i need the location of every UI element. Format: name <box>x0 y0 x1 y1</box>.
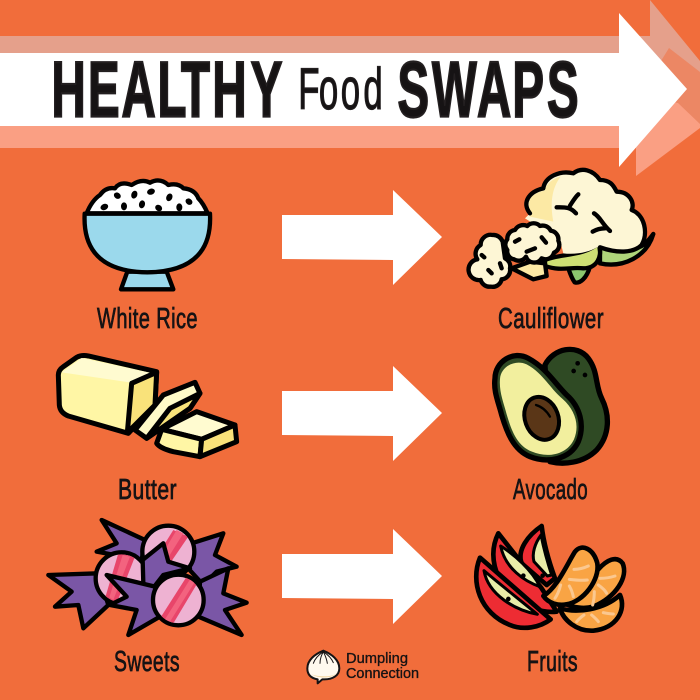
label: butter: Butter <box>118 474 177 506</box>
label: sweets: Sweets <box>114 646 180 678</box>
arrow: butter to avocado <box>282 366 442 461</box>
icon: avocado <box>495 349 607 463</box>
label: avocado: Avocado <box>513 474 588 506</box>
label: white rice: White Rice <box>97 303 198 335</box>
icon: sweets <box>48 520 247 635</box>
label: fruits: Fruits <box>527 646 578 678</box>
icon: cauliflower <box>469 170 653 287</box>
icon: butter <box>58 356 237 457</box>
arrow: rice to cauliflower <box>282 190 442 285</box>
logo: dumpling connection <box>307 651 419 683</box>
icon: fruits <box>476 526 624 631</box>
label: cauliflower: Cauliflower <box>498 303 604 335</box>
logo text <box>346 651 419 682</box>
logo text: Connection <box>346 666 419 682</box>
icon: white rice bowl <box>85 180 210 289</box>
title: Food <box>298 58 383 122</box>
title: SWAPS <box>398 45 579 133</box>
title <box>51 45 579 133</box>
title: HEALTHY <box>51 45 282 133</box>
icon: dumpling <box>307 651 339 683</box>
banner arrow <box>0 0 700 176</box>
logo text: Dumpling <box>346 651 408 667</box>
arrow: sweets to fruits <box>282 529 442 624</box>
